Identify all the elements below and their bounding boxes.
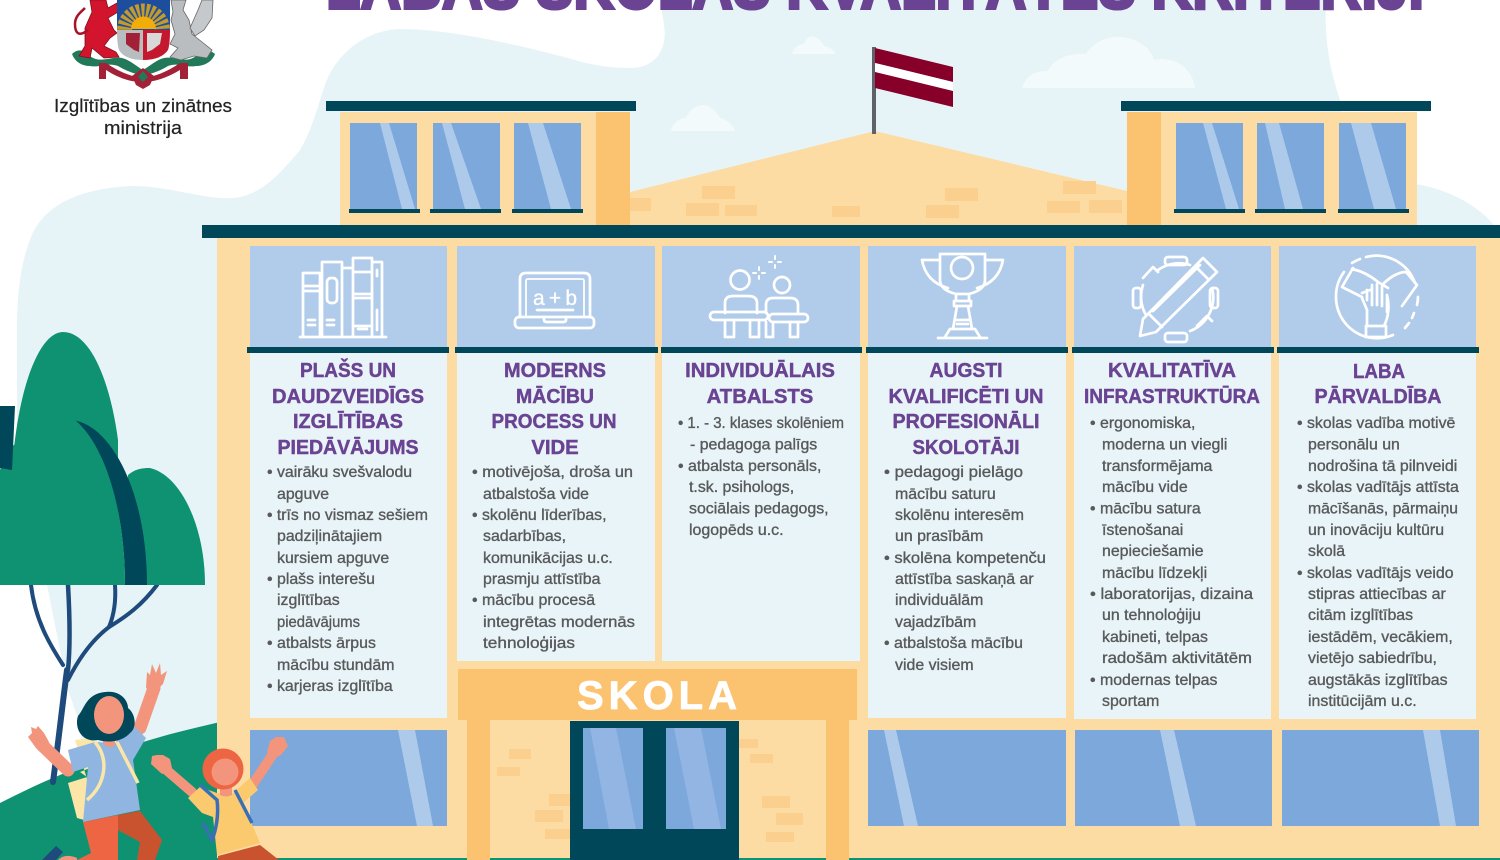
bullet list: • atbalsta personāls, (678, 458, 821, 475)
bullet list: • pedagogi pielāgo (884, 464, 1023, 481)
heading: PĀRVALDĪBA (1314, 386, 1442, 408)
bullet list: un tehnoloģiju (1102, 606, 1201, 624)
bullet list: • modernas telpas (1090, 672, 1218, 689)
door (570, 721, 739, 860)
red lion (75, 0, 119, 58)
bullet list: augstākās izglītības (1308, 672, 1448, 689)
trousers (77, 815, 118, 860)
panel: column 4 (866, 246, 1068, 718)
bullet list: mācību vide (1102, 479, 1188, 496)
wing windows (349, 123, 583, 213)
entrance sign (458, 669, 857, 720)
white wedge lower left (0, 585, 82, 860)
bullet list: mācību stundām (277, 657, 394, 674)
bullet list: institūcijām u.c. (1308, 693, 1417, 710)
heading: DAUDZVEIDĪGS (272, 386, 424, 408)
bullet list (472, 464, 635, 652)
heading: PROFESIONĀLI (892, 411, 1040, 433)
bullet list: • mācību satura (1090, 500, 1201, 518)
heading: KVALITATĪVA (1108, 360, 1236, 382)
bullet list: padziļinātajiem (277, 528, 382, 545)
bullet list: vide visiem (895, 657, 974, 674)
building wall (217, 238, 1500, 860)
ministry name: ministrija (104, 117, 183, 138)
bullet list: • motivējoša, droša un (472, 464, 633, 481)
icon: pupils at desks (710, 256, 808, 337)
logo: coat of arms (72, 0, 215, 89)
tree trunk and branches (31, 585, 157, 782)
bullet list (267, 464, 428, 695)
bullet list: apguve (277, 486, 329, 503)
bullet list: t.sk. psihologs, (689, 479, 794, 496)
clouds (671, 36, 1195, 131)
silver griffin (170, 0, 213, 60)
icon: books (300, 258, 386, 337)
trousers (218, 845, 279, 860)
bullet list (1090, 415, 1253, 710)
bullet list (884, 464, 1046, 674)
bullet list: sadarbības, (483, 528, 566, 545)
shirt (188, 778, 260, 855)
arms (42, 688, 154, 770)
heading: INDIVIDUĀLAIS (685, 360, 835, 382)
flag (872, 47, 953, 134)
entrance (458, 669, 857, 860)
bullet list: • skolas vadītājs attīsta (1297, 479, 1459, 496)
bullet list: izglītības (277, 592, 340, 609)
bullet list: nepieciešamie (1102, 543, 1204, 560)
tree foliage (10, 332, 118, 585)
bullet list: • skolēna kompetenču (884, 550, 1046, 567)
bullet list: • skolas vadītājs veido (1297, 565, 1454, 582)
hill (0, 722, 220, 860)
heading (1084, 360, 1260, 408)
bullet list: personālu un (1308, 436, 1400, 454)
heading: KVALIFICĒTI UN (888, 386, 1044, 408)
icon: laptop: a+b (533, 287, 577, 310)
central gable (630, 131, 1127, 226)
bullet list: • atbalsts ārpus (267, 635, 376, 652)
ministry name: Izglītības un zinātnes (54, 95, 232, 116)
bullet list: mācību saturu (895, 486, 996, 503)
backpack straps (200, 785, 252, 840)
bullet list: skolā (1308, 543, 1345, 560)
girl illustration (28, 663, 167, 860)
bullet list: • 1. - 3. klases skolēniem (678, 415, 844, 432)
heading (888, 360, 1044, 459)
heading: IZGLĪTĪBAS (293, 411, 403, 433)
bullet list: • skolēnu līderības, (472, 507, 607, 524)
arms (163, 754, 273, 792)
bullet list: mācīšanās, pārmaiņu (1308, 500, 1458, 518)
bullet list: īstenošanai (1102, 522, 1183, 539)
bullet list: integrētas modernās (483, 614, 635, 631)
upper right wing (1121, 101, 1431, 226)
heading: PROCESS UN (492, 411, 616, 433)
panel: column 6 (1277, 246, 1479, 719)
lower windows (250, 730, 1479, 826)
bullet list: un prasībām (895, 528, 983, 545)
bullet list: nodrošina tā pilnveidi (1308, 458, 1457, 475)
bullet list: kabineti, telpas (1102, 629, 1208, 646)
icon: joined hands (1336, 256, 1418, 338)
panel: column 5 (1072, 246, 1274, 719)
heading (1314, 361, 1442, 408)
panel: column 3 (661, 246, 862, 661)
hair (77, 692, 135, 742)
bullet list: - pedagoga palīgs (690, 436, 817, 454)
heading: PLAŠS UN (300, 358, 396, 382)
bullet list: moderna un viegli (1102, 436, 1227, 454)
icon: gear and pencil (1133, 257, 1218, 342)
bullet list: mācību līdzekļi (1102, 565, 1207, 582)
boy illustration (151, 737, 288, 860)
main roof (202, 225, 1500, 238)
bullet list: • trīs no vismaz sešiem (267, 507, 428, 524)
bullet list: • ergonomiska, (1090, 415, 1195, 432)
bullet list: stipras attiecības ar (1308, 586, 1446, 603)
heading (685, 360, 835, 408)
bottom grass strip (0, 858, 1500, 860)
bullet list: prasmju attīstība (483, 571, 601, 588)
heading: MODERNS (504, 360, 606, 382)
bullet list: individuālām (895, 592, 983, 609)
backpack (68, 738, 95, 820)
entrance sign: SKOLA (577, 674, 737, 718)
bullet list: vietējo sabiedrību, (1308, 650, 1437, 667)
bullet list: transformējama (1102, 458, 1213, 475)
panel: column 1 (247, 246, 449, 718)
ministry name (54, 95, 232, 138)
bullet list (678, 415, 844, 539)
bullet list: • plašs interešu (267, 571, 375, 588)
bullet list: iestādēm, vecākiem, (1308, 629, 1453, 646)
bullet list: piedāvājums (277, 614, 360, 631)
tree (0, 332, 205, 782)
shoe and foot (42, 846, 63, 860)
bullet list: radošām aktivitātēm (1102, 650, 1252, 667)
heading: PIEDĀVĀJUMS (278, 437, 418, 459)
wreath (72, 50, 215, 76)
bullet list: • mācību procesā (472, 592, 595, 609)
heading: SKOLOTĀJI (912, 437, 1020, 459)
bullet list: tehnoloģijas (483, 634, 575, 652)
upper left wing (326, 101, 636, 226)
icon: laptop (515, 273, 594, 328)
bullet list: komunikācijas u.c. (483, 550, 613, 567)
bullet list: • atbalstoša mācību (884, 635, 1023, 652)
bullet list: vajadzībām (895, 614, 976, 631)
bullet list: kursiem apguve (277, 550, 389, 567)
bullet list: sociālais pedagogs, (689, 500, 829, 518)
bullet list: atbalstoša vide (483, 486, 589, 503)
bullet list: un inovāciju kultūru (1308, 522, 1444, 539)
wing windows (1174, 123, 1409, 213)
bullet list: • laboratorijas, dizaina (1090, 586, 1253, 603)
heading: MĀCĪBU (516, 386, 594, 408)
panel: column 2 (455, 246, 658, 661)
heading: INFRASTRUKTŪRA (1084, 386, 1260, 408)
bullet list (1297, 415, 1459, 710)
bullet list: skolēnu interesēm (895, 507, 1024, 524)
heading: ATBALSTS (707, 386, 813, 408)
bullet list: • skolas vadība motivē (1297, 415, 1456, 432)
bullet list: attīstība saskaņā ar (895, 571, 1034, 588)
bullet list: logopēds u.c. (689, 522, 784, 539)
icon: trophy (922, 254, 1003, 338)
hair (202, 748, 244, 790)
heading: LABA (1353, 361, 1405, 383)
bullet list: sportam (1102, 693, 1159, 710)
ribbon (99, 63, 188, 82)
heading (492, 360, 616, 459)
shield (117, 0, 170, 60)
shirt (68, 725, 146, 822)
bullet list: • vairāku svešvalodu (267, 464, 412, 481)
bullet list: citām izglītības (1308, 607, 1413, 624)
heading: AUGSTI (930, 360, 1002, 382)
heading: VIDE (531, 437, 579, 459)
bullet list: • karjeras izglītība (267, 678, 393, 695)
heading (272, 358, 424, 459)
